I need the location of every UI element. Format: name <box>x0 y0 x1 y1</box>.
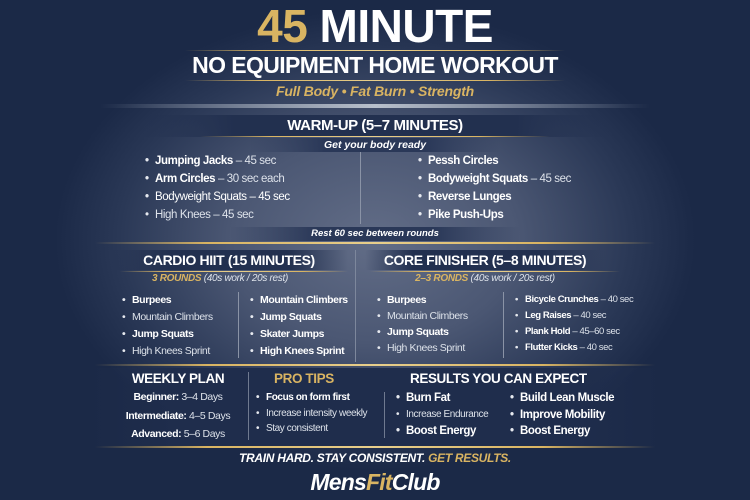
list: warm-up left: Arm Circles – 30 sec each <box>155 173 284 185</box>
title: 45 MINUTE <box>257 0 493 52</box>
list: core right <box>515 294 634 353</box>
results right: Improve Mobility <box>520 408 605 420</box>
list: cardio left: Jump Squats <box>132 328 194 340</box>
tips list: Stay consistent <box>266 423 328 434</box>
tips list <box>256 392 368 434</box>
subheading <box>250 138 500 152</box>
list: core left <box>377 294 468 354</box>
list: cardio left: Mountain Climbers <box>132 311 213 323</box>
slogan: TRAIN HARD. STAY CONSISTENT. GET RESULTS. <box>239 451 511 465</box>
panel: cardio hiit <box>122 250 348 358</box>
rounds: 2–3 RONDS (40s work / 20s rest) <box>415 273 555 284</box>
heading: core <box>365 250 605 270</box>
list: warm-up left: Bodyweight Squats – 45 sec <box>155 191 290 203</box>
tagline: Full Body • Fat Burn • Strength <box>276 83 474 99</box>
list: core right: Flutter Kicks – 40 sec <box>525 342 612 353</box>
subheading: Get your body ready <box>324 139 426 151</box>
note: rest: Rest 60 sec between rounds <box>311 228 439 239</box>
panel: warm-up <box>145 115 571 241</box>
list: warm-up left: High Knees – 45 sec <box>155 209 254 221</box>
list: cardio left: High Knees Sprint <box>132 345 210 357</box>
list: warm-up right <box>418 155 571 221</box>
list: cardio right: Mountain Climbers <box>260 294 348 306</box>
list: core left: Burpees <box>387 294 426 306</box>
results right <box>510 392 614 437</box>
list: warm-up left <box>145 155 290 221</box>
subtitle: NO EQUIPMENT HOME WORKOUT <box>192 52 558 78</box>
list: cardio right: Jump Squats <box>260 311 322 323</box>
results left: Burn Fat <box>406 392 450 404</box>
panel: weekly plan <box>126 371 230 440</box>
list: cardio right: High Knees Sprint <box>260 345 344 357</box>
heading: cardio <box>110 250 348 270</box>
list: core right: Bicycle Crunches – 40 sec <box>525 294 633 305</box>
heading: pro tips: PRO TIPS <box>274 371 334 386</box>
list: warm-up right: Pessh Circles <box>428 155 498 167</box>
tips list: Focus on form first <box>266 392 350 403</box>
heading: weekly: WEEKLY PLAN <box>132 371 224 386</box>
list: warm-up right: Bodyweight Squats – 45 sec <box>428 173 571 185</box>
logo: MensFitClub <box>310 469 440 495</box>
results right: Build Lean Muscle <box>520 392 614 404</box>
weekly items: Intermediate: 4–5 Days <box>126 410 230 422</box>
results left <box>396 392 488 437</box>
list: core left: Jump Squats <box>387 326 449 338</box>
list: cardio left: Burpees <box>132 294 171 306</box>
heading: core: CORE FINISHER (5–8 MINUTES) <box>384 252 586 268</box>
weekly items: Beginner: 3–4 Days <box>133 391 223 403</box>
list: cardio right: Skater Jumps <box>260 328 324 340</box>
list: core right: Leg Raises – 40 sec <box>525 310 606 321</box>
results left: Boost Energy <box>406 425 476 437</box>
list: warm-up left: Jumping Jacks – 45 sec <box>155 155 276 167</box>
panel: pro tips <box>256 371 368 434</box>
rounds: 3 ROUNDS (40s work / 20s rest) <box>152 273 288 284</box>
panel: results <box>396 371 614 437</box>
list: warm-up right: Pike Push-Ups <box>428 209 503 221</box>
heading: warm-up <box>140 115 610 137</box>
list: cardio right <box>250 294 348 357</box>
list: core right: Plank Hold – 45–60 sec <box>525 326 620 337</box>
panel: bottom band <box>90 368 660 446</box>
tips list: Increase intensity weekly <box>266 408 367 418</box>
heading: results: RESULTS YOU CAN EXPECT <box>410 371 587 386</box>
list: core left: High Knees Sprint <box>387 342 465 354</box>
list: core left: Mountain Climbers <box>387 310 468 322</box>
panel: core finisher <box>372 250 634 358</box>
list: cardio left <box>122 294 213 357</box>
heading: warm-up: WARM-UP (5–7 MINUTES) <box>287 117 463 134</box>
weekly items: Advanced: 5–6 Days <box>131 428 225 440</box>
list: warm-up right: Reverse Lunges <box>428 191 511 203</box>
results right: Boost Energy <box>520 425 590 437</box>
weekly items <box>126 391 230 440</box>
results left: Increase Endurance <box>406 408 488 420</box>
note: rest <box>230 227 520 241</box>
heading: cardio: CARDIO HIIT (15 MINUTES) <box>143 252 315 268</box>
